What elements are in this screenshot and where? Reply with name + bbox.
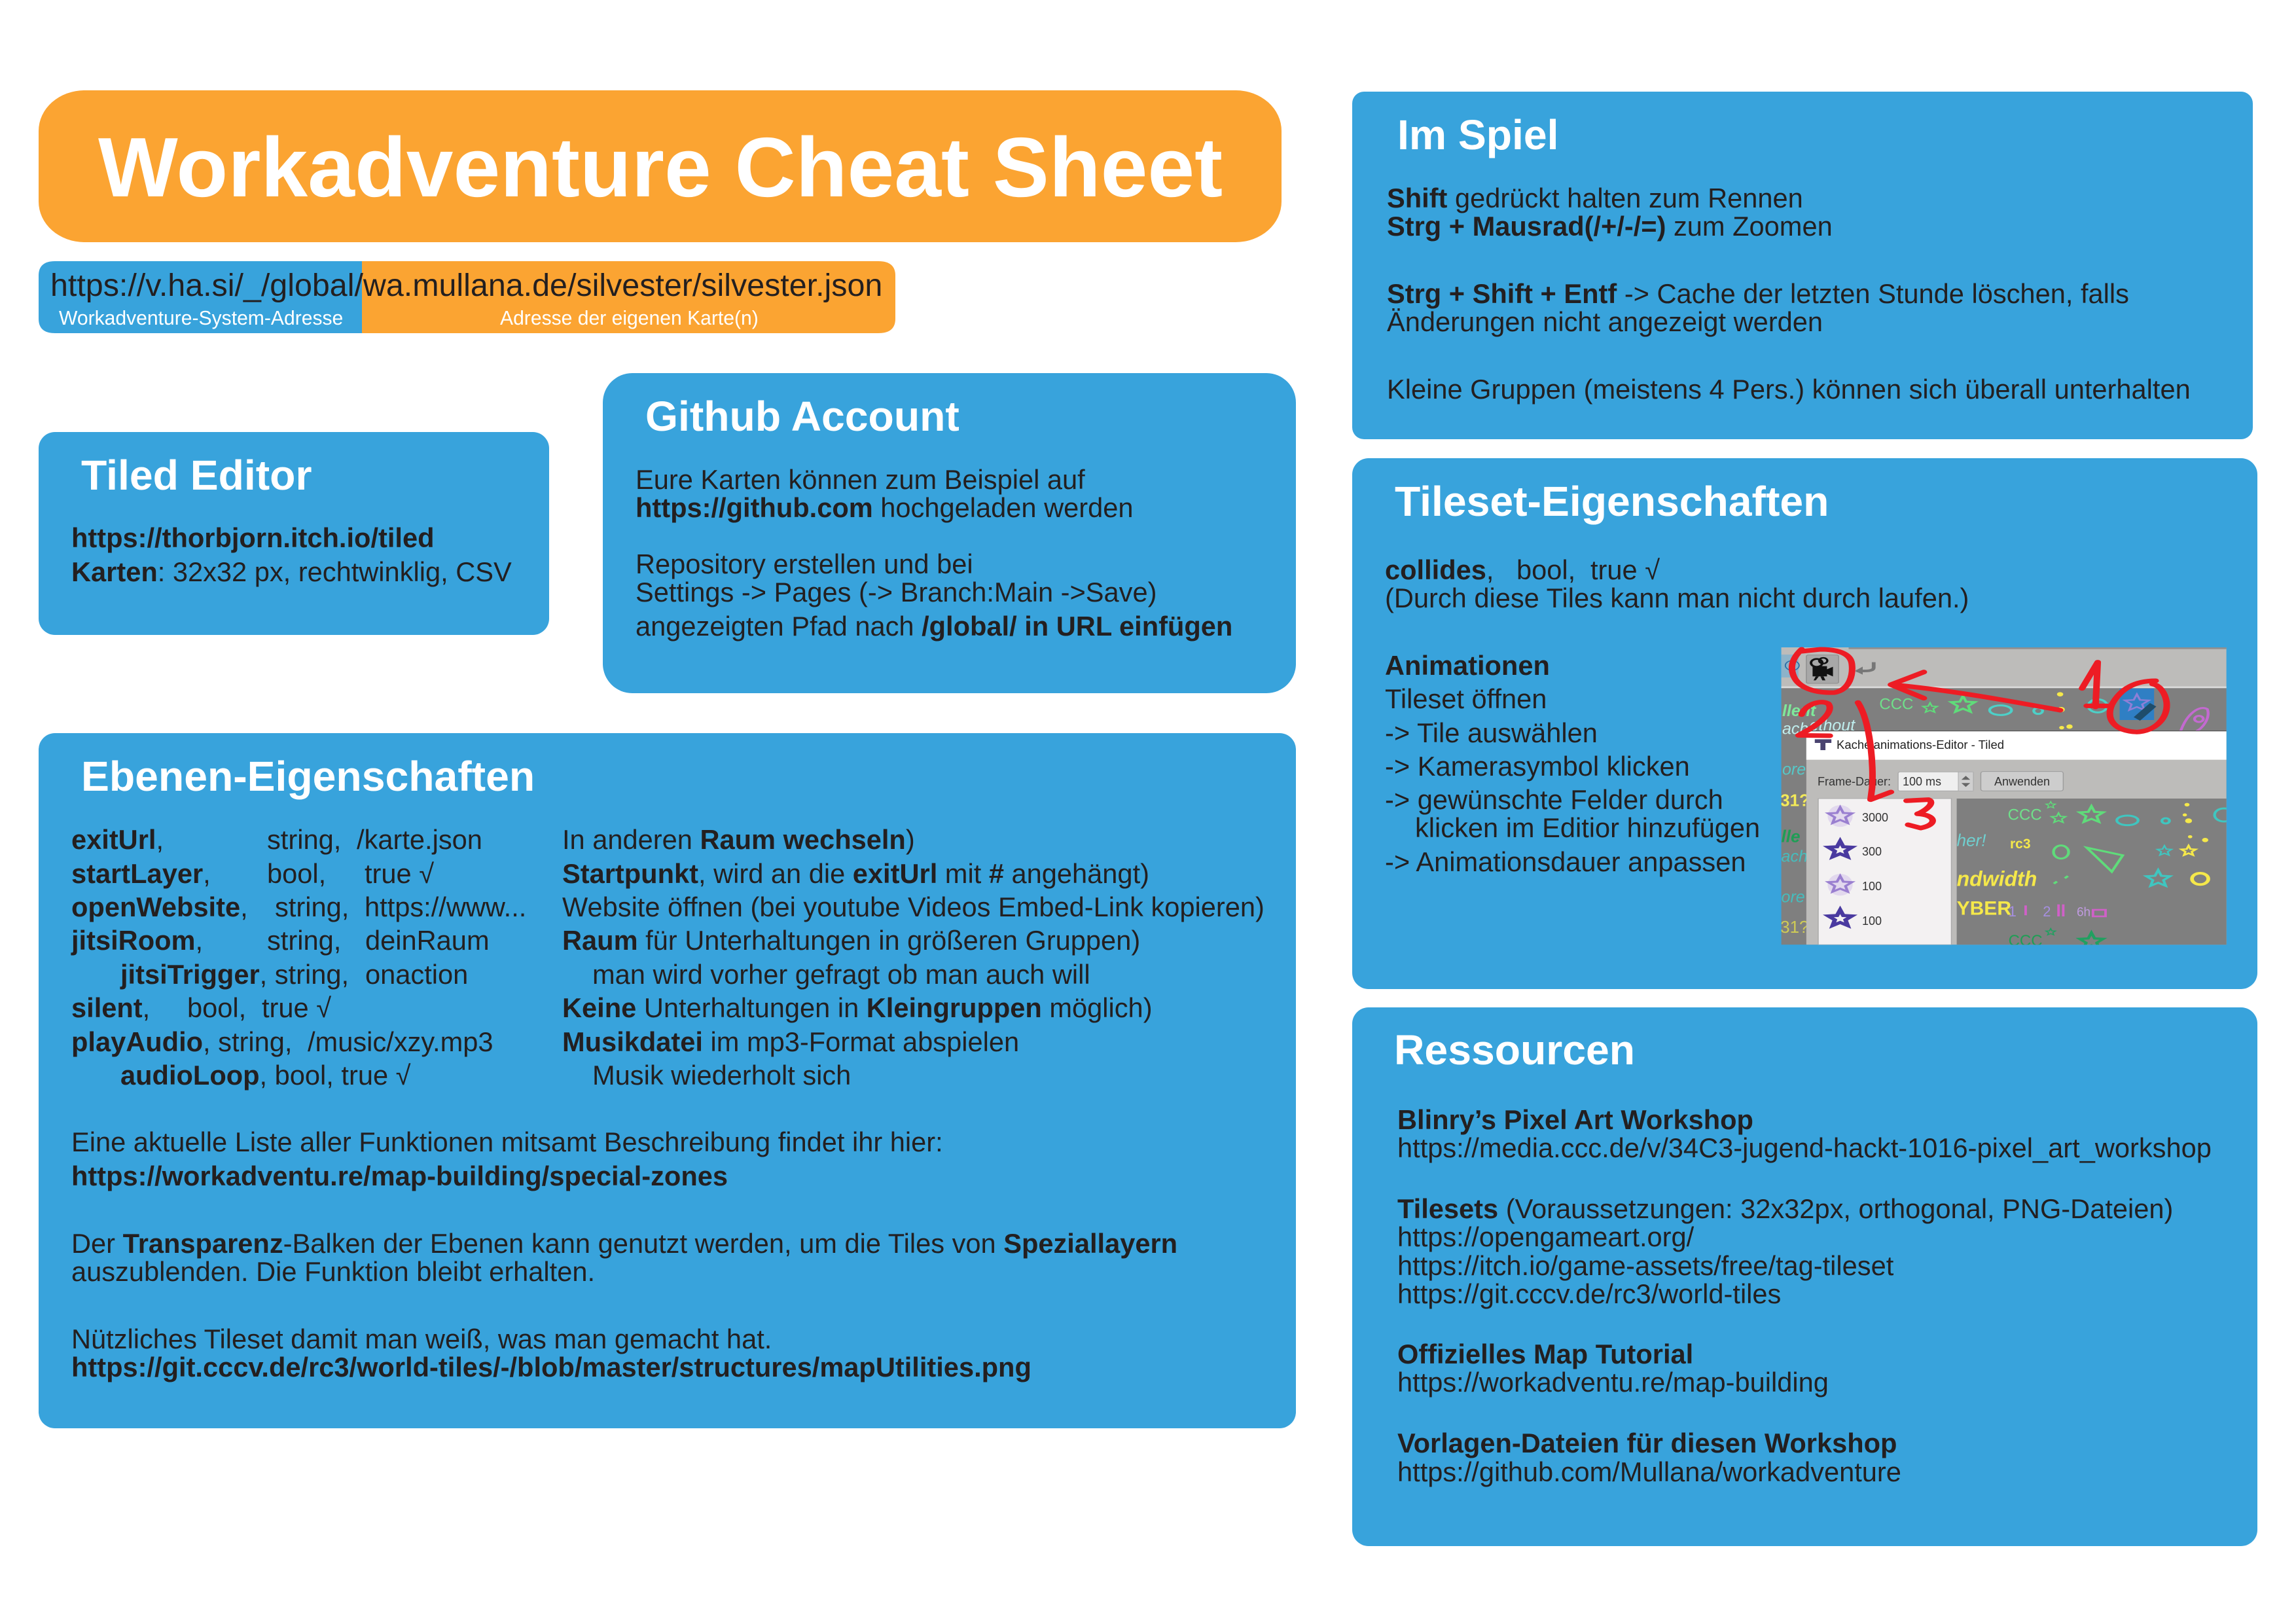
text: Github instructions <box>636 464 1232 641</box>
red hand-drawn annotations <box>1792 649 2167 828</box>
heading: Im Spiel: Im Spiel <box>1397 111 1559 158</box>
text: collides: collides, <box>1385 554 1494 585</box>
text: animation steps: -> Tile auswählen <box>1385 717 1598 748</box>
selected tile <box>2120 689 2154 720</box>
property table: playAudio, string, <box>71 1026 292 1057</box>
resource: Map Tutorial: https://workadventu.re/map-building <box>1397 1367 1829 1398</box>
map address caption: Adresse der eigenen Karte(n) <box>500 308 759 329</box>
heading: Tileset-Eigenschaften: Tileset-Eigenschaften <box>1395 478 1829 525</box>
screenshot UI labels: Anwenden <box>1994 775 2050 788</box>
toolbar camera button <box>1806 655 1839 683</box>
screenshot UI labels: 3000 <box>1862 811 1888 824</box>
system address caption: Workadventure-System-Adresse <box>59 308 343 329</box>
tile art: grid labels: rc3 <box>2010 837 2031 852</box>
property table: Website öffnen (bei youtube Videos Embed-Link kopieren) <box>562 892 1265 922</box>
tile art: grid labels: 1 <box>2009 903 2017 920</box>
resource: Tilesets: https://opengameart.org/ <box>1397 1221 1695 1252</box>
text: animation steps <box>1385 650 1760 877</box>
title: Workadventure Cheat Sheet <box>98 120 1223 215</box>
screenshot: Tiled animation editor with red annotations <box>1780 647 2233 950</box>
text: animation steps: -> Animationsdauer anpassen <box>1385 846 1746 877</box>
animation editor window <box>1806 731 2227 945</box>
resource: Tilesets <box>1397 1193 2173 1309</box>
property table: string, <box>275 892 349 922</box>
resource: Tilesets: https://itch.io/game-assets/free/tag-tileset <box>1397 1250 1894 1281</box>
text: transparency hint: auszublenden. Die Funktion bleibt erhalten. <box>71 1256 595 1287</box>
text: Github instructions: Repository erstellen und bei <box>636 549 973 579</box>
resource: Tilesets: https://git.cccv.de/rc3/world-tiles <box>1397 1278 1781 1309</box>
text: Tiled link and map format: Karten: 32x32 px, rechtwinklig, CSV <box>71 556 512 587</box>
property table: silent, <box>71 992 150 1023</box>
text: transparency hint <box>71 1228 1177 1287</box>
property table: man wird vorher gefragt ob man auch will <box>592 959 1090 990</box>
text: collides <box>1385 554 1969 613</box>
text: animation steps: -> Kamerasymbol klicken <box>1385 751 1690 782</box>
tile art: toolbar strip: llent <box>1782 702 1817 720</box>
property table: jitsiTrigger, string, <box>120 959 349 990</box>
heading: Ressourcen: Ressourcen <box>1394 1026 1635 1074</box>
resource: Workshop templates: Vorlagen-Dateien für diesen Workshop <box>1397 1428 1897 1458</box>
property table: Musikdatei im mp3-Format abspielen <box>562 1026 1019 1057</box>
screenshot UI labels: 100 ms <box>1903 775 1941 788</box>
title banner <box>39 90 1282 242</box>
tile art: toolbar strip <box>1780 695 1913 937</box>
frame duration field <box>1898 772 1973 791</box>
property table: jitsiRoom, <box>71 925 203 956</box>
text: collides: (Durch diese Tiles kann man nicht durch laufen.) <box>1385 583 1969 613</box>
tile art: grid labels: YBER <box>1957 898 2011 920</box>
property table: audioLoop, bool, true √ <box>120 1060 411 1091</box>
resource: Map Tutorial: Offizielles Map Tutorial <box>1397 1339 1693 1369</box>
property table: bool, <box>187 992 246 1023</box>
text: function list link: Eine aktuelle Liste aller Funktionen mitsamt Beschreibung findet ihr hier: <box>71 1127 943 1157</box>
tile art: grid labels: her! <box>1957 831 1986 850</box>
tile art: toolbar strip: 31? <box>1780 917 1809 937</box>
tile art: grid labels: 6h <box>2077 905 2090 919</box>
resource: Tilesets: Tilesets (Voraussetzungen: 32x32px, orthogonal, PNG-Dateien) <box>1397 1193 2173 1224</box>
text: collides: true √ <box>1590 554 1660 585</box>
screenshot UI labels: Kachelanimations-Editor - Tiled <box>1837 738 2004 751</box>
text: Tiled link and map format <box>71 522 512 587</box>
tile art: grid labels: CCC <box>2008 806 2042 824</box>
apply button <box>1981 772 2063 791</box>
property table: Musik wiederholt sich <box>592 1060 851 1091</box>
text: Github instructions: Eure Karten können zum Beispiel auf <box>636 464 1085 495</box>
heading: Tiled Editor: Tiled Editor <box>81 452 312 499</box>
tile art: toolbar strip: ach <box>1782 720 1808 738</box>
property table: string, <box>267 925 341 956</box>
panel: Github Account <box>603 373 1296 693</box>
property table: onaction <box>365 959 468 990</box>
text: animation steps: klicken im Editior hinzufügen <box>1415 812 1760 843</box>
text: useful tileset <box>71 1324 1031 1382</box>
text: shortcuts: Kleine Gruppen (meistens 4 Pers.) können sich überall unterhalten <box>1387 374 2191 405</box>
property table: Startpunkt, wird an die exitUrl mit # angehängt) <box>562 858 1149 889</box>
screenshot UI labels: 100 <box>1862 914 1882 928</box>
resource: Workshop templates <box>1397 1428 1901 1487</box>
tile art: grid labels: 2 <box>2043 903 2051 920</box>
text: collides: bool, <box>1516 554 1575 585</box>
tile art: toolbar strip: CCC <box>1879 695 1913 713</box>
property table: Raum für Unterhaltungen in größeren Gruppen) <box>562 925 1140 956</box>
tile art: toolbar strip: ore <box>1782 888 1805 906</box>
text: useful tileset: https://git.cccv.de/rc3/world-tiles/-/blob/master/structures/mapUtilities.png <box>71 1352 1031 1382</box>
property table: /karte.json <box>357 824 482 855</box>
heading: Ebenen-Eigenschaften: Ebenen-Eigenschaften <box>81 753 535 800</box>
resource: Workshop templates: https://github.com/Mullana/workadventure <box>1397 1456 1901 1487</box>
resource: Map Tutorial <box>1397 1339 1829 1398</box>
property table: startLayer, <box>71 858 211 889</box>
screenshot UI labels: 300 <box>1862 845 1882 858</box>
panel: Ressourcen <box>1352 1007 2257 1546</box>
text: animation steps: -> gewünschte Felder durch <box>1385 784 1723 815</box>
frame list <box>1818 799 1951 945</box>
panel: Tileset-Eigenschaften <box>1352 458 2257 989</box>
resource: Pixel Art Workshop: Blinry’s Pixel Art Workshop <box>1397 1104 1753 1135</box>
property table: In anderen Raum wechseln) <box>562 824 915 855</box>
text: shortcuts: Strg + Shift + Entf -> Cache der letzten Stunde löschen, falls <box>1387 278 2129 309</box>
heading: Github Account: Github Account <box>645 393 960 440</box>
property table: true √ <box>365 858 434 889</box>
address text: https://v.ha.si/_/global/wa.mullana.de/silvester/silvester.json <box>50 268 882 303</box>
property table: string, <box>267 824 341 855</box>
text: shortcuts: Strg + Mausrad(/+/-/=) zum Zoomen <box>1387 211 1833 242</box>
panel: Tiled Editor <box>39 432 549 635</box>
text: shortcuts: Änderungen nicht angezeigt werden <box>1387 306 1823 337</box>
property table: bool, <box>267 858 326 889</box>
address bar <box>39 261 895 333</box>
text: transparency hint: Der Transparenz-Balken der Ebenen kann genutzt werden, um die Tiles von Speziallayern <box>71 1228 1177 1259</box>
property table: /music/xzy.mp3 <box>308 1026 493 1057</box>
resource: Pixel Art Workshop: https://media.ccc.de/v/34C3-jugend-hackt-1016-pixel_art_workshop <box>1397 1132 2212 1163</box>
text: Github instructions: angezeigten Pfad nach /global/ in URL einfügen <box>636 611 1232 641</box>
text: Github instructions: Settings -> Pages (-> Branch:Main ->Save) <box>636 577 1157 607</box>
panel: Ebenen-Eigenschaften <box>39 733 1296 1428</box>
screenshot UI labels: 100 <box>1862 880 1882 893</box>
text: function list link <box>71 1127 943 1191</box>
screenshot UI labels: Frame-Dauer: <box>1818 775 1891 788</box>
tile art: toolbar strip: ore <box>1782 760 1806 778</box>
text: useful tileset: Nützliches Tileset damit man weiß, was man gemacht hat. <box>71 1324 772 1354</box>
text: function list link: https://workadventu.re/map-building/special-zones <box>71 1161 728 1191</box>
property table: deinRaum <box>365 925 490 956</box>
text: shortcuts <box>1387 183 2191 405</box>
tile art: toolbar strip: lle <box>1782 827 1800 846</box>
text: animation steps: Animationen <box>1385 650 1550 681</box>
property table: exitUrl, <box>71 824 164 855</box>
property table: https://www... <box>365 892 526 922</box>
tile art: toolbar strip: 31? <box>1780 791 1810 810</box>
tile art: grid labels: CCC <box>2009 932 2043 950</box>
panel: Im Spiel <box>1352 92 2253 439</box>
property table: true √ <box>262 992 331 1023</box>
property table <box>71 824 1265 1091</box>
text: Github instructions: https://github.com hochgeladen werden <box>636 492 1134 523</box>
tile grid <box>1957 799 2227 945</box>
property table: openWebsite, <box>71 892 248 922</box>
text: Tiled link and map format: https://thorbjorn.itch.io/tiled <box>71 522 435 553</box>
text: animation steps: Tileset öffnen <box>1385 683 1547 714</box>
tile art: toolbar strip: ach <box>1782 848 1808 866</box>
tile art: toolbar strip: ethout <box>1810 717 1856 735</box>
screenshot UI labels <box>1818 738 2050 928</box>
tile art: grid labels <box>1957 806 2090 950</box>
property table: Keine Unterhaltungen in Kleingruppen möglich) <box>562 992 1153 1023</box>
text: shortcuts: Shift gedrückt halten zum Rennen <box>1387 183 1803 213</box>
resource: Pixel Art Workshop <box>1397 1104 2212 1163</box>
tile art: grid labels: ndwidth <box>1957 867 2037 890</box>
